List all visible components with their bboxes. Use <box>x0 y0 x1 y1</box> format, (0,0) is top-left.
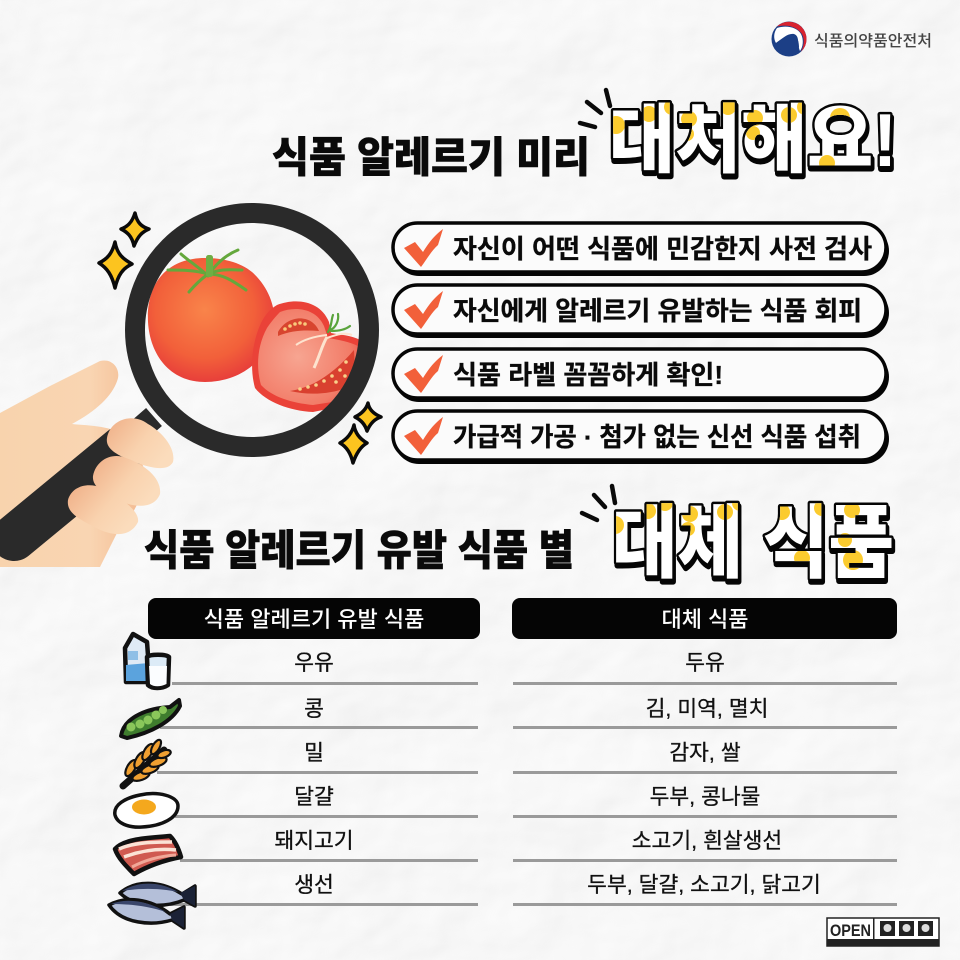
heading: 대체 식품: 대체 식품 <box>612 499 894 588</box>
row: 생선: 생선 <box>294 873 334 897</box>
icon: check <box>404 355 443 393</box>
icon: check <box>404 417 443 455</box>
pill 1: 자신이 어떤 식품에 민감한지 사전 검사 <box>453 234 872 264</box>
magnifier with tomatoes <box>135 213 369 447</box>
tomatoes inside lens <box>148 250 362 412</box>
pill 4: 가급적 가공 · 첨가 없는 신선 식품 섭취 <box>453 422 861 452</box>
logo: 식품의약품안전처 <box>772 22 932 56</box>
table header: allergens: 식품 알레르기 유발 식품 <box>204 607 424 632</box>
icon: check <box>404 229 443 267</box>
logo: 식품의약품안전처: 식품의약품안전처 <box>814 32 932 50</box>
row: 두부, 달걀, 소고기, 닭고기 <box>513 873 897 906</box>
row: 콩: 콩 <box>304 697 324 721</box>
magnifier ring <box>135 213 369 447</box>
row: 달걀 <box>175 785 478 818</box>
icon: taegeuk emblem <box>772 22 806 56</box>
hand holding magnifier <box>0 360 173 567</box>
table: allergens <box>148 598 480 906</box>
icon: fish <box>109 883 195 928</box>
row: 생선 <box>170 873 478 906</box>
title: 식품 알레르기 유발 식품 별: 식품 알레르기 유발 식품 별 <box>144 527 574 574</box>
magnifier handle <box>14 417 154 538</box>
row: 우유: 우유 <box>294 651 334 675</box>
icon: sparkles lower <box>340 403 381 463</box>
pill 1 <box>393 223 889 276</box>
icon: sparkles upper <box>99 213 149 288</box>
checklist <box>393 223 889 464</box>
icon: milk <box>125 634 169 688</box>
icon: burst lines (title 1) <box>580 90 610 127</box>
hand: fingers <box>68 418 173 534</box>
heading: 대처해요!: 대처해요! <box>609 98 897 182</box>
illustration: whole tomato <box>148 250 274 382</box>
badge: OPEN license <box>827 918 939 946</box>
pill 3: 식품 라벨 꼼꼼하게 확인! <box>453 360 723 390</box>
row: 감자, 쌀: 감자, 쌀 <box>669 741 741 765</box>
row: 우유 <box>172 651 478 685</box>
table: substitutes <box>512 598 897 906</box>
icon: wheat <box>123 738 172 786</box>
icon: peas <box>121 700 180 738</box>
hand: palm and index finger <box>0 360 150 567</box>
row: 김, 미역, 멸치 <box>513 697 897 729</box>
icon: bacon <box>115 836 181 874</box>
pill 4 <box>393 411 889 464</box>
row: 돼지고기 <box>180 829 478 862</box>
row: 밀: 밀 <box>304 741 324 765</box>
row: 소고기, 흰살생선 <box>513 829 897 862</box>
row: 소고기, 흰살생선: 소고기, 흰살생선 <box>632 829 782 853</box>
table header: allergens <box>148 598 480 639</box>
row: 달걀: 달걀 <box>294 785 334 809</box>
heading: 대체 식품: 대체 식품 <box>613 502 895 591</box>
title: 식품 알레르기 미리: 식품 알레르기 미리 <box>272 134 590 181</box>
row: 돼지고기: 돼지고기 <box>274 829 354 853</box>
row: 두부, 콩나물 <box>513 785 897 818</box>
row: 두유: 두유 <box>685 651 725 675</box>
row: 콩 <box>160 697 478 729</box>
pill 2 <box>393 285 889 338</box>
pill 2: 자신에게 알레르기 유발하는 식품 회피 <box>453 296 862 326</box>
badge: OPEN license: OPEN <box>830 921 871 940</box>
table header: substitutes: 대체 식품 <box>661 607 749 632</box>
illustration: cut tomato <box>252 301 362 412</box>
icon: check <box>404 291 443 329</box>
pill 3 <box>393 349 889 402</box>
row: 밀 <box>157 741 478 774</box>
row: 두부, 콩나물: 두부, 콩나물 <box>650 785 760 809</box>
table header: substitutes <box>512 598 897 639</box>
row: 김, 미역, 멸치: 김, 미역, 멸치 <box>646 697 768 721</box>
heading: 대처해요!: 대처해요! <box>610 101 898 185</box>
row: 감자, 쌀 <box>513 741 897 774</box>
icon: fried egg <box>115 794 178 827</box>
row: 두유 <box>513 651 897 685</box>
row: 두부, 달걀, 소고기, 닭고기: 두부, 달걀, 소고기, 닭고기 <box>587 873 821 897</box>
icon: burst lines (title 2) <box>582 486 615 520</box>
